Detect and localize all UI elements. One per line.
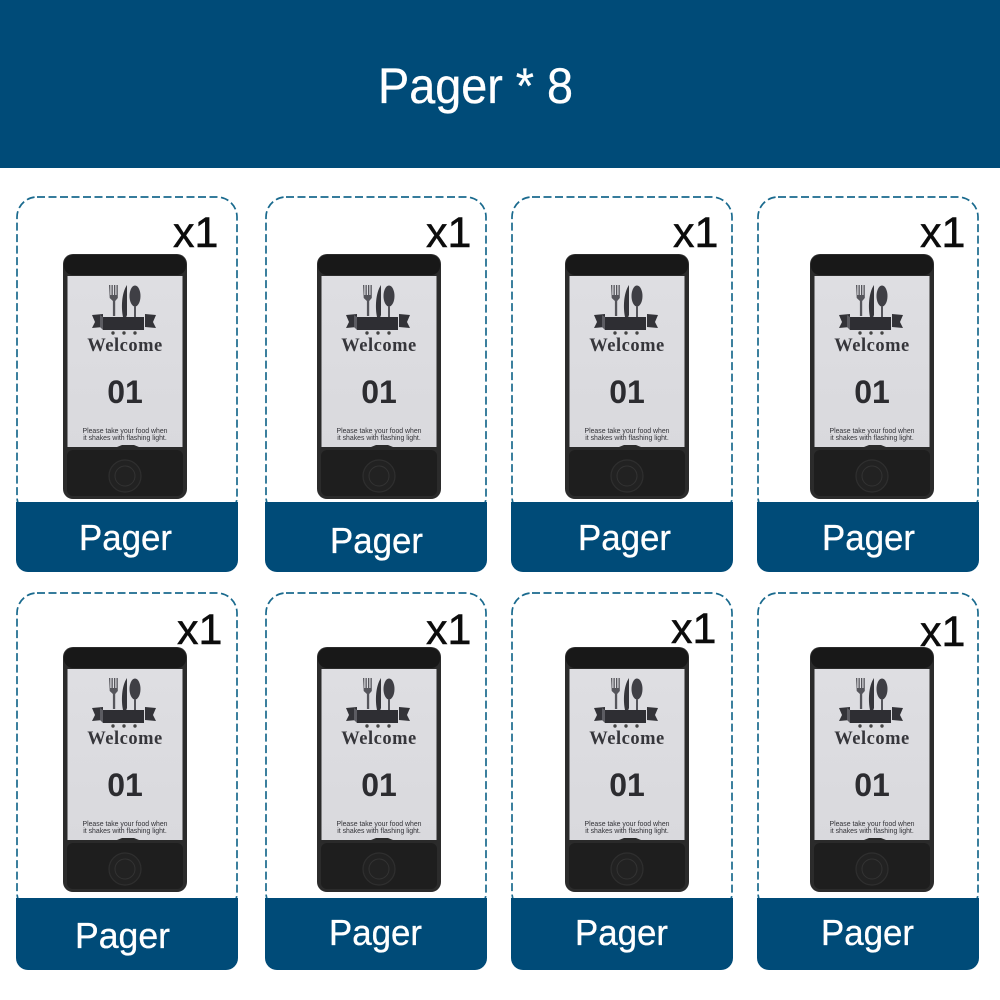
title: Pager * 8: [378, 58, 573, 114]
label band: [511, 898, 733, 970]
pager device: Welcome: [87, 729, 163, 749]
panel: pager card 2: [265, 197, 487, 572]
label: Pager: [822, 517, 915, 558]
quantity: x1: [426, 209, 471, 257]
pager device: Please take your food when: [829, 821, 915, 828]
pager device: Welcome: [341, 336, 417, 356]
pager device: Please take your food when: [829, 428, 915, 435]
label: Pager: [79, 517, 172, 558]
pager device: it shakes with flashing light.: [83, 435, 167, 442]
label band: [757, 502, 979, 572]
quantity: x1: [426, 606, 471, 654]
pager device: 01: [107, 374, 143, 410]
quantity: x1: [673, 209, 718, 257]
quantity: x1: [173, 209, 218, 257]
pager device: [317, 254, 441, 499]
label band: [16, 502, 238, 572]
label: Pager: [75, 915, 170, 956]
label: Pager: [821, 912, 914, 953]
pager device: 01: [361, 374, 397, 410]
pager device: it shakes with flashing light.: [830, 435, 914, 442]
pager device: it shakes with flashing light.: [830, 828, 914, 835]
panel: pager card 1: [16, 197, 238, 572]
pager device: [317, 647, 441, 892]
pager device: Please take your food when: [584, 821, 670, 828]
quantity: x1: [920, 608, 965, 656]
pager device: [810, 254, 934, 499]
pager device: 01: [854, 767, 890, 803]
label band: [16, 898, 238, 970]
pager device: Welcome: [589, 336, 665, 356]
pager device: it shakes with flashing light.: [585, 435, 669, 442]
label band: [511, 502, 733, 572]
pager device: 01: [609, 767, 645, 803]
panel: pager card 4: [757, 197, 979, 572]
pager device: Welcome: [87, 336, 163, 356]
pager device: 01: [361, 767, 397, 803]
label: Pager: [575, 912, 668, 953]
pager device: [63, 254, 187, 499]
quantity: x1: [671, 605, 716, 653]
pager device: Welcome: [834, 729, 910, 749]
label: Pager: [330, 520, 423, 561]
pager device: [565, 647, 689, 892]
panel: pager card 7: [511, 593, 733, 970]
pager device: Welcome: [834, 336, 910, 356]
label band: [757, 898, 979, 970]
panel: pager card 6: [265, 593, 487, 970]
pager device: Welcome: [589, 729, 665, 749]
panel: pager card 5: [16, 593, 238, 970]
panel: pager card 8: [757, 593, 979, 970]
label band: [265, 502, 487, 572]
pager device: Welcome: [341, 729, 417, 749]
pager device: Please take your food when: [82, 428, 168, 435]
pager device: it shakes with flashing light.: [83, 828, 167, 835]
pager device: 01: [854, 374, 890, 410]
pager device: it shakes with flashing light.: [337, 828, 421, 835]
quantity: x1: [920, 209, 965, 257]
header banner: [0, 0, 1000, 168]
pager device: 01: [107, 767, 143, 803]
pager device: Please take your food when: [336, 821, 422, 828]
label band: [265, 898, 487, 970]
pager device: Please take your food when: [584, 428, 670, 435]
pager device: Please take your food when: [82, 821, 168, 828]
pager device: Please take your food when: [336, 428, 422, 435]
pager device: [810, 647, 934, 892]
pager device: 01: [609, 374, 645, 410]
pager device: it shakes with flashing light.: [337, 435, 421, 442]
quantity: x1: [177, 606, 222, 654]
panel: pager card 3: [511, 197, 733, 572]
pager device: [63, 647, 187, 892]
label: Pager: [578, 517, 671, 558]
label: Pager: [329, 912, 422, 953]
pager device: it shakes with flashing light.: [585, 828, 669, 835]
pager device: [565, 254, 689, 499]
